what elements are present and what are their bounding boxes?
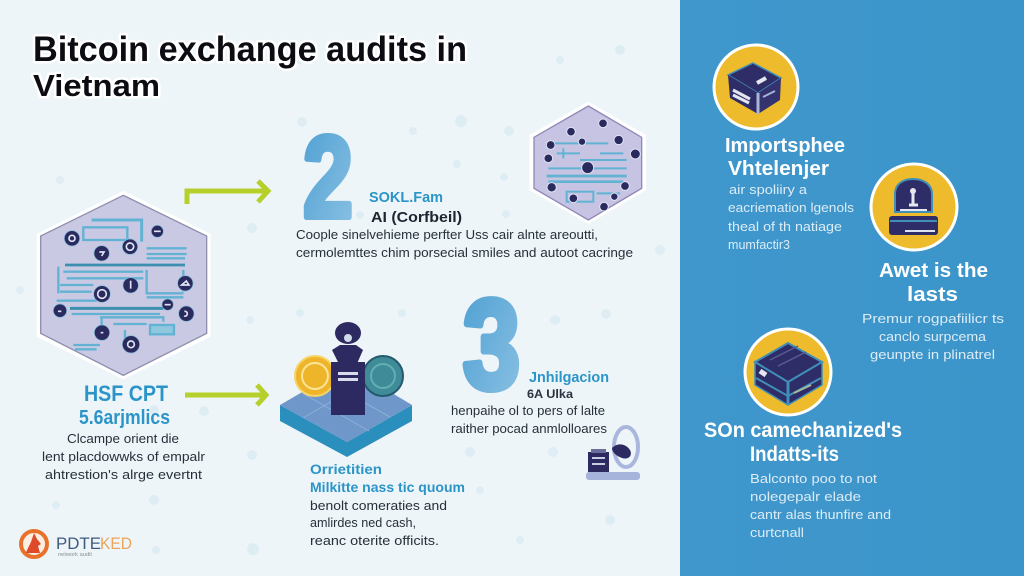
item 1 body: mumfactir3	[728, 237, 790, 252]
left subheading: 5.6arjmlics	[79, 407, 170, 429]
title: Bitcoin exchange audits in	[33, 30, 467, 69]
item 1 body: air spoliiry a	[729, 182, 808, 197]
item 3 heading	[704, 419, 902, 466]
item 1 body: eacriemation lgenols	[728, 200, 855, 215]
logo: KED	[100, 534, 132, 553]
step 2 subheading: AI (Corfbeil)	[371, 209, 462, 226]
icon: podium with coins	[280, 322, 412, 457]
item 2 heading: Awet is the	[879, 260, 988, 282]
arrow: upper green arrow	[187, 181, 268, 204]
step 3 body: raither pocad anmlolloares	[451, 421, 608, 436]
item 1 heading: Vhtelenjer	[728, 158, 829, 180]
item 2 heading	[879, 260, 988, 306]
left body: ahtrestion's alrge evertnt	[45, 467, 202, 482]
icon: yellow badge with stacked crate	[745, 329, 831, 415]
item 2 body: Premur rogpafiilicr ts	[862, 311, 1005, 326]
step 3 body	[451, 403, 608, 436]
step 4 text block	[310, 461, 465, 548]
icon: building with headset	[586, 427, 640, 480]
item 2 heading: lasts	[907, 284, 958, 306]
item 3 body	[750, 471, 891, 540]
item 1 heading	[725, 135, 845, 180]
item 2 body: canclo surpcema	[879, 329, 987, 344]
numeral 2: 2	[303, 112, 353, 242]
step 2 block	[296, 112, 633, 260]
item 3 body: Balconto poo to not	[750, 471, 877, 486]
left heading: HSF CPT	[84, 381, 168, 406]
step 4 body: amlirdes ned cash,	[310, 515, 416, 530]
panel: right blue column	[680, 0, 1024, 576]
step 2 heading: SOKL.Fam	[369, 189, 443, 206]
arrow: lower green arrow	[185, 385, 266, 405]
step 4 subheading: Milkitte nass tic quoum	[310, 479, 465, 495]
icon: yellow badge with crate	[714, 45, 798, 129]
left body: lent placdowwks of empalr	[42, 449, 206, 464]
step 4 body: reanc oterite officits.	[310, 533, 439, 548]
step 4 heading: Orrietitien	[310, 461, 382, 477]
step 3 heading: Jnhilgacion	[529, 369, 609, 386]
step 4 body	[310, 498, 447, 548]
icon: large circuit hexagon	[37, 191, 211, 379]
icon: small circuit hexagon	[529, 102, 646, 224]
left block: HSF CPT	[42, 381, 206, 482]
item 3 body: curtcnall	[750, 525, 804, 540]
item 2 body	[862, 311, 1005, 362]
item 3 heading: SOn camechanized's	[704, 419, 902, 442]
item 1 body: theal of th natiage	[728, 219, 842, 234]
icon: yellow badge with monument	[871, 164, 957, 250]
item 3 heading: Indatts-its	[750, 443, 839, 466]
step 3 subheading: 6A Ulka	[527, 387, 573, 401]
step 2 body: cermolemttes chim porsecial smiles and autoot cacringe	[296, 245, 633, 260]
step 3 body: henpaihe ol to pers of lalte	[451, 403, 605, 418]
item 3 body: cantr alas thunfire and	[750, 507, 891, 522]
title	[33, 30, 467, 103]
step 2 body	[296, 227, 633, 260]
numeral 3: 3	[463, 274, 520, 415]
item 3 body: nolegepalr elade	[750, 489, 861, 504]
left body: Clcampe orient die	[67, 431, 179, 446]
panel item 2	[862, 164, 1005, 362]
logo: PDTE	[56, 534, 101, 553]
panel item 1	[714, 45, 855, 252]
item 1 body	[728, 182, 855, 252]
item 1 heading: Importsphee	[725, 135, 845, 157]
title: Vietnam	[33, 68, 160, 103]
logo	[21, 531, 132, 558]
step 2 body: Coople sinelvehieme perfter Uss cair alnte areoutti,	[296, 227, 598, 242]
panel item 3	[704, 329, 902, 540]
logo: network audit	[58, 552, 93, 558]
step 4 body: benolt comeraties and	[310, 498, 447, 513]
left body	[42, 431, 206, 482]
step 3 block	[451, 274, 609, 436]
item 2 body: geunpte in plinatrel	[870, 347, 995, 362]
